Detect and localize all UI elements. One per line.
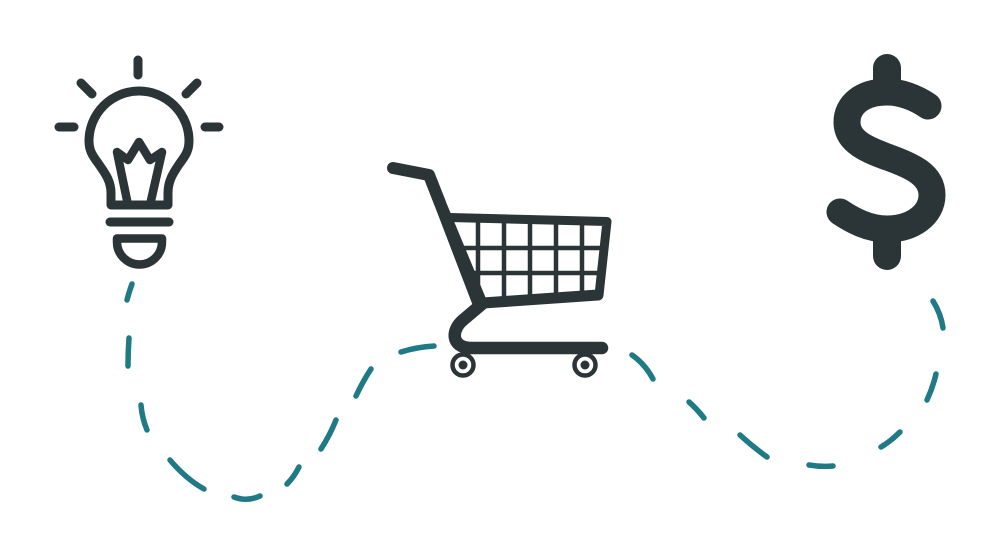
- basket grid: [462, 220, 603, 300]
- bulb collar: [110, 218, 169, 226]
- bulb glass: [89, 91, 189, 205]
- icon: shopping cart: [393, 168, 607, 376]
- chassis: [455, 304, 602, 348]
- bulb base: [117, 238, 162, 264]
- wheel: right: [574, 354, 596, 376]
- handle and frame: [393, 168, 487, 306]
- basket frame: [450, 218, 607, 295]
- icon: dollar sign: [840, 54, 932, 270]
- dashed path connecting the icons: [127, 284, 943, 499]
- light rays: [59, 60, 219, 127]
- filament: [117, 142, 162, 205]
- basket bottom rail: [483, 295, 598, 303]
- wheel: left: [452, 354, 474, 376]
- icon: light bulb: [59, 60, 219, 264]
